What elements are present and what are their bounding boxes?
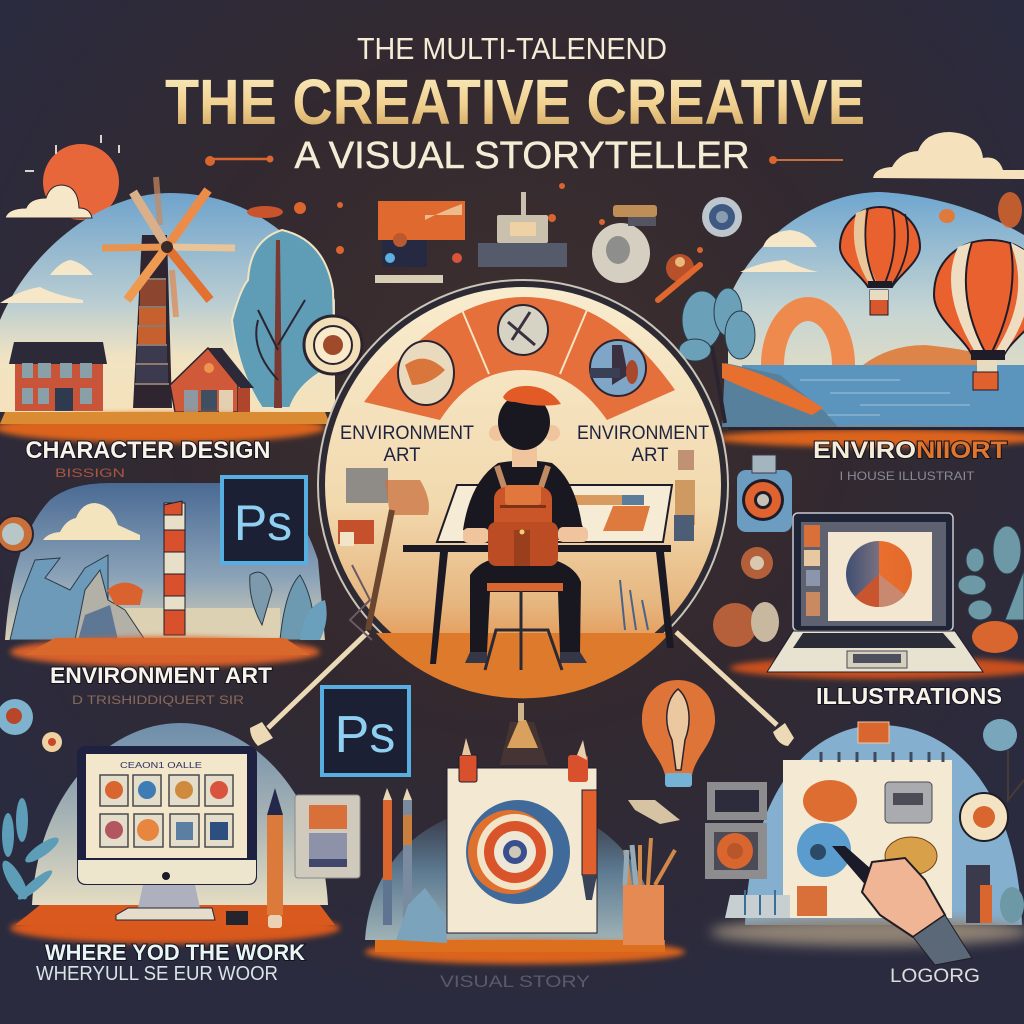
logo orange [803, 780, 857, 822]
rock [396, 888, 447, 943]
tool hammer [658, 254, 700, 300]
ground [376, 633, 670, 698]
heading: the multi-talenend: THE MULTI-TALENEND [357, 31, 667, 66]
sub-label smudge right: I HOUSE ILLUSTRAIT [840, 469, 975, 483]
tan backdrop [90, 608, 280, 638]
target artwork [466, 800, 570, 904]
decorative discs [0, 699, 62, 752]
arc dividers [462, 310, 587, 374]
sign [858, 722, 889, 743]
disc [0, 516, 33, 552]
label: environment art right [577, 423, 709, 466]
sleeve [913, 915, 972, 965]
thumbnail right [590, 340, 646, 396]
orange line [769, 156, 1022, 228]
label: visual story: VISUAL STORY [440, 972, 590, 991]
thumbnail center [498, 305, 548, 355]
ground [715, 427, 1024, 447]
Ps logo upper: Ps [234, 495, 292, 551]
panel: middle-right laptop [713, 455, 1024, 679]
paint brushes [383, 788, 412, 925]
panel: central creative at desk [250, 280, 794, 746]
cloud [43, 503, 140, 540]
panel: top-left windmill landscape [0, 135, 362, 443]
torso and arms [463, 460, 585, 540]
heading: the creative creative: THE CREATIVE CREATIVE [165, 66, 865, 138]
small trinket [628, 800, 680, 824]
ground [730, 657, 1024, 679]
pen [832, 846, 897, 905]
logo grey [885, 782, 932, 823]
round badge [960, 793, 1008, 841]
circle frame [318, 280, 728, 690]
balloon large [934, 240, 1024, 390]
panel: bottom-right sketchbook [623, 680, 1024, 987]
ground [10, 637, 320, 667]
drawing board [437, 485, 672, 542]
thumbnail grid [100, 775, 233, 847]
brick house [9, 342, 107, 411]
portfolio card [295, 795, 360, 878]
sun ring [761, 297, 855, 365]
sub-label smudge left: D TRISHIDDIQUERT SIR [72, 693, 244, 707]
hanging lamp [500, 703, 548, 765]
desk lamp [478, 192, 567, 267]
backpack [488, 466, 558, 566]
brush pot [623, 838, 675, 945]
legs [470, 558, 581, 652]
label: environiiort: ENVIRO NIIORT [813, 437, 1007, 464]
Ps logo lower [322, 687, 409, 775]
label line two: WHERYULL SE EUR WOOR [36, 963, 278, 985]
label: environment art left: ART [384, 445, 421, 466]
label: logorg: LOGORG [890, 966, 980, 987]
thumbnail left [398, 341, 454, 405]
logo blue [797, 823, 851, 877]
flower [983, 719, 1024, 800]
spiral binding [821, 752, 943, 762]
laptop [767, 513, 983, 672]
figure [463, 386, 588, 663]
lake ripples [800, 380, 970, 415]
drawing hand [862, 858, 945, 937]
logo gold [885, 837, 937, 875]
title block [165, 31, 865, 177]
sparks and orange line [25, 135, 306, 218]
ground [10, 905, 340, 944]
hot air balloon bulb [642, 680, 715, 787]
sub-label smudge: BISSIGN [55, 466, 125, 480]
ground [365, 940, 685, 964]
label: environment art right: ENVIRONMENT [577, 423, 709, 444]
monitor [77, 746, 257, 920]
logo sketch strip [725, 886, 827, 918]
sky dome [5, 483, 325, 640]
barn [170, 348, 254, 412]
cap [503, 386, 561, 406]
circle interior [325, 287, 721, 683]
hands [463, 527, 588, 543]
red tube left [459, 738, 477, 782]
orange art card [378, 201, 465, 267]
blue disc [702, 197, 742, 237]
soft dome [365, 805, 660, 940]
plant [0, 798, 62, 903]
connector arrow left [250, 632, 368, 746]
panel: bottom-left portfolio monitor [0, 699, 360, 944]
label line one: WHERE YOD THE WORK [45, 940, 305, 965]
speaker [737, 455, 792, 532]
dome [32, 723, 328, 905]
plant [958, 526, 1024, 620]
panel: middle-left environment art [0, 483, 327, 667]
right props [966, 865, 1024, 923]
bush [713, 602, 779, 647]
small disc [741, 547, 773, 579]
labels: where you see the work [36, 940, 305, 985]
Ps logo upper [222, 477, 306, 563]
sky dome [728, 192, 1024, 367]
neck [512, 445, 537, 467]
label: environment art left: ENVIRONMENT [340, 423, 474, 444]
sketchbook [783, 760, 952, 918]
label: character design: CHARACTER DESIGN [26, 437, 270, 464]
ears [489, 425, 560, 441]
ground [0, 412, 330, 443]
desk [403, 545, 674, 664]
sun [43, 144, 119, 220]
receipt strip [375, 275, 443, 283]
windmill [102, 177, 235, 408]
panel: bottom-center canvas [365, 703, 685, 991]
striped chimney [164, 501, 185, 635]
shore tree [679, 288, 838, 427]
Ps logo lower: Ps [335, 706, 395, 764]
grey device [592, 205, 657, 283]
lake [742, 365, 1024, 427]
ground [710, 918, 1024, 946]
monitor caption: CEAON1 OALLE [120, 761, 202, 770]
sky dome [0, 193, 335, 412]
image stack [705, 782, 767, 879]
balloon small [840, 207, 920, 315]
large cloud [873, 132, 1024, 179]
rocks and trees [10, 555, 327, 640]
thumbnail art [105, 781, 228, 841]
clouds [0, 185, 93, 303]
shoes [465, 652, 587, 663]
sky clouds [740, 230, 818, 272]
heading: a visual storyteller: A VISUAL STORYTELLER [294, 135, 750, 177]
lens disc [304, 316, 362, 374]
tree [232, 230, 335, 408]
connector arrow right [676, 632, 794, 746]
head [498, 394, 550, 450]
label: environment art: ENVIRONMENT ART [50, 663, 273, 688]
stool [485, 583, 563, 670]
hills [863, 345, 985, 365]
pot [972, 621, 1018, 653]
canvas [447, 768, 597, 933]
orange arc band [364, 297, 675, 420]
circle labels [340, 423, 709, 466]
marker right [568, 740, 597, 900]
scattered dots [336, 183, 703, 295]
dome [745, 725, 1022, 925]
sketches left [338, 468, 429, 640]
label: illustrations: ILLUSTRATIONS [816, 683, 1002, 709]
panel: top center props [336, 183, 703, 300]
label: environment art left [340, 423, 474, 466]
small desk device [226, 911, 248, 925]
sketches right [620, 450, 695, 630]
panel: top-right balloons landscape [679, 132, 1024, 447]
pencil [267, 788, 283, 928]
label: environment art right: ART [632, 445, 669, 466]
